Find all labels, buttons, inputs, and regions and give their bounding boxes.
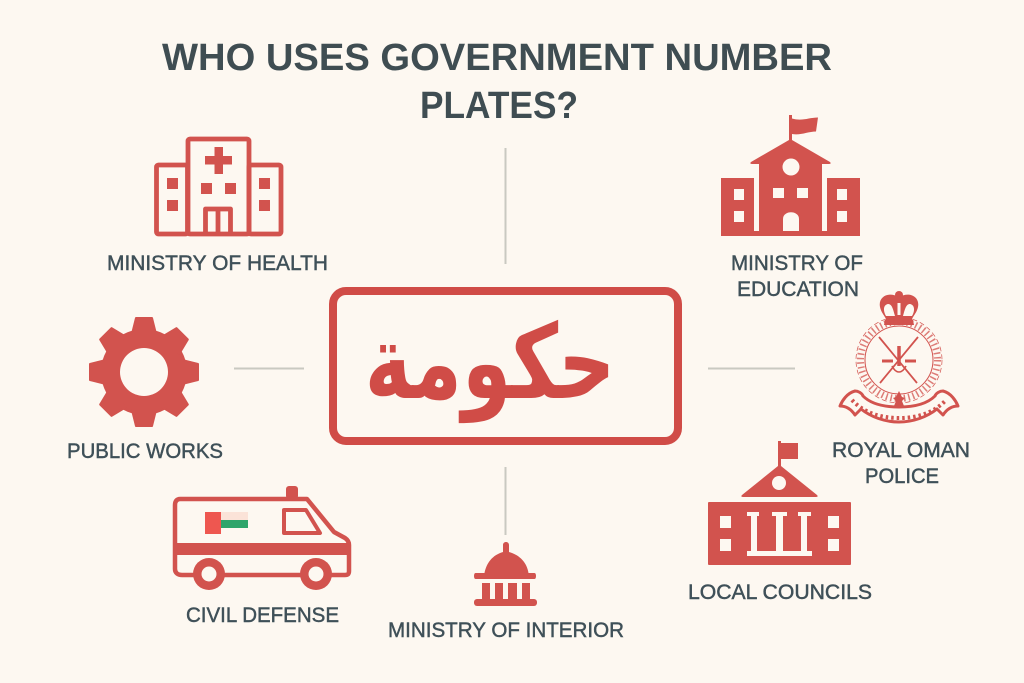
- icon: ambulance: [175, 486, 351, 590]
- icon: police emblem: [840, 291, 958, 422]
- label: EDUCATION: [737, 278, 859, 301]
- title: PLATES?: [420, 85, 578, 127]
- icon: council building: [708, 441, 851, 565]
- panel: ministry of education: [721, 115, 863, 301]
- arabic word on plate: حكومة: [365, 303, 615, 424]
- panel: royal oman police: [832, 291, 970, 488]
- label: [832, 439, 970, 488]
- label: [731, 252, 863, 301]
- ribbon: [840, 391, 958, 422]
- title: [162, 37, 832, 127]
- label: MINISTRY OF: [731, 252, 863, 275]
- label: POLICE: [865, 465, 939, 488]
- title: WHO USES GOVERNMENT NUMBER: [162, 37, 832, 79]
- panel: ministry of interior: [388, 542, 624, 642]
- panel: civil defense: [175, 486, 351, 627]
- panel: ministry of health: [107, 139, 328, 275]
- panel: local councils: [688, 441, 872, 604]
- label: CIVIL DEFENSE: [186, 604, 339, 627]
- label: MINISTRY OF INTERIOR: [388, 619, 624, 642]
- panel: public works: [67, 318, 223, 463]
- icon: gear: [90, 318, 198, 426]
- label: LOCAL COUNCILS: [688, 581, 872, 604]
- crossed swords and dagger: [879, 337, 918, 383]
- label: MINISTRY OF HEALTH: [107, 252, 328, 275]
- central plate: [333, 291, 678, 441]
- icon: domed building: [474, 542, 537, 606]
- label: ROYAL OMAN: [832, 439, 970, 462]
- crown: [880, 291, 918, 325]
- wreath: [856, 317, 942, 403]
- icon: hospital: [156, 139, 281, 234]
- icon: school: [721, 115, 860, 236]
- label: PUBLIC WORKS: [67, 440, 223, 463]
